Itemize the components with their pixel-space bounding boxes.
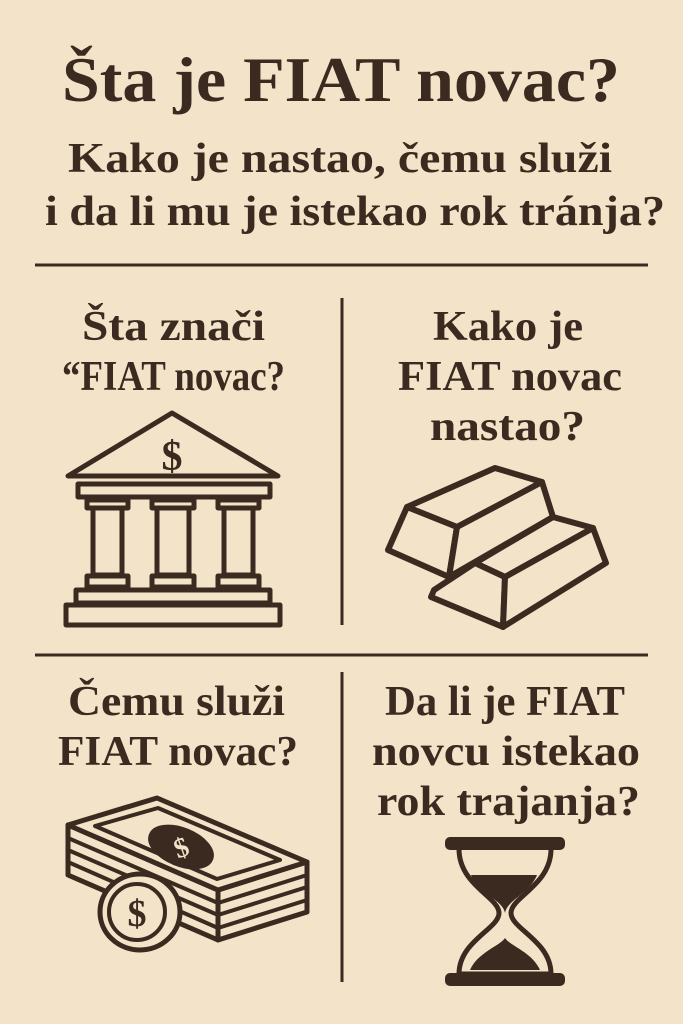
heading: Da li je FIAT novcu istekao rok trajanja: Da li je FIAT	[385, 679, 625, 725]
heading: Čemu služi FIAT novac	[58, 677, 298, 775]
subtitle	[45, 136, 665, 235]
heading: Šta znači FIAT novac	[62, 302, 285, 400]
title: Šta je FIAT novac?	[62, 44, 620, 115]
subtitle: i da li mu je istekao rok tránja?	[45, 189, 665, 235]
icon: money stack and coin: $	[128, 893, 146, 935]
icon: bank building: $	[162, 434, 182, 480]
heading: Kako je FIAT novac nastao: nastao?	[430, 404, 585, 450]
heading: Šta znači FIAT novac: “FIAT novac?	[62, 354, 285, 400]
icon: bank building	[66, 413, 280, 625]
heading: Da li je FIAT novcu istekao rok trajanja: novcu istekao	[372, 729, 640, 775]
heading: Čemu služi FIAT novac: FIAT novac?	[58, 729, 298, 775]
heading: Da li je FIAT novcu istekao rok trajanja	[372, 679, 640, 825]
heading: Kako je FIAT novac nastao: FIAT novac	[398, 354, 622, 400]
subtitle: Kako je nastao, čemu služi	[68, 136, 612, 182]
icon: hourglass	[446, 838, 564, 985]
icon: gold bars	[388, 468, 606, 627]
icon: money stack and coin	[68, 798, 307, 950]
heading: Šta znači FIAT novac: Šta znači	[82, 302, 265, 350]
heading: Kako je FIAT novac nastao	[398, 304, 622, 450]
heading: Kako je FIAT novac nastao: Kako je	[433, 304, 583, 350]
heading: Čemu služi FIAT novac: Čemu služi	[68, 677, 285, 725]
icon: money stack and coin: $	[170, 831, 193, 865]
heading: Da li je FIAT novcu istekao rok trajanja: rok trajanja?	[377, 779, 640, 825]
